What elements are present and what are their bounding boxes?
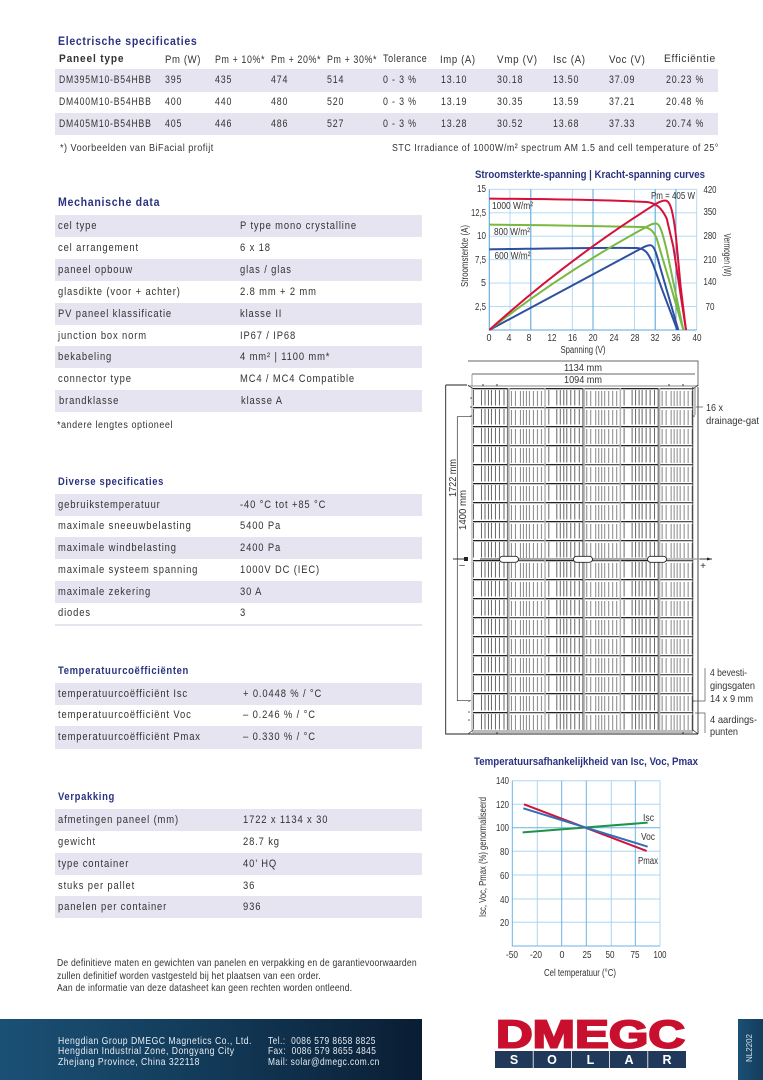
heading: diverse specifications: Diverse specificaties <box>58 476 164 488</box>
table: diverse specifications <box>55 494 422 626</box>
table row: DM405M10-B54HBB: 13.28 <box>441 118 467 130</box>
table row: DM400M10-B54HBB: 13.19 <box>441 96 467 108</box>
irradiance labels: 800 W/m² <box>494 227 531 238</box>
irradiance labels: 1000 W/m² <box>492 201 534 212</box>
table row: DM395M10-B54HBB: 37.09 <box>609 74 635 86</box>
table row: DM395M10-B54HBB: 474 <box>271 74 288 86</box>
drainage callout: 16 x <box>706 403 724 414</box>
table: diverse specifications: diodes <box>58 607 91 619</box>
table: mechanical data: connector type <box>58 373 132 385</box>
phone fax mail: Fax: 0086 579 8655 4845 <box>268 1046 376 1057</box>
phone fax mail <box>268 1036 380 1068</box>
table row: DM395M10-B54HBB: 435 <box>215 74 232 86</box>
table row: DM405M10-B54HBB: 37.33 <box>609 118 635 130</box>
table header: electrical specifications: Vmp (V) <box>497 54 538 66</box>
table row: DM395M10-B54HBB: 13.50 <box>553 74 579 86</box>
table: temperature coefficients: – 0.330 % / °C <box>243 731 316 743</box>
table header: electrical specifications: Paneel type <box>59 53 124 65</box>
table: mechanical data: 6 x 18 <box>240 242 271 254</box>
heading: mechanical data: Mechanische data <box>58 197 160 209</box>
mounting holes callout: 14 x 9 mm <box>710 694 753 705</box>
table: temperature coefficients: – 0.246 % / °C <box>243 709 316 721</box>
table row: DM400M10-B54HBB: 20.48 % <box>666 96 704 108</box>
y axis labels: 60 <box>500 871 509 882</box>
dimension labels: 1722 mm <box>448 459 459 497</box>
table row: DM400M10-B54HBB <box>59 96 704 108</box>
table: diverse specifications: 3 <box>240 607 246 619</box>
table row: DM395M10-B54HBB: DM395M10-B54HBB <box>59 74 152 86</box>
company address <box>58 1036 252 1068</box>
table row: DM405M10-B54HBB: 486 <box>271 118 288 130</box>
table row: DM405M10-B54HBB: 13.68 <box>553 118 579 130</box>
right axis labels: 210 <box>704 255 717 266</box>
table header: electrical specifications: Pm (W) <box>165 54 201 66</box>
table: mechanical data: bekabeling <box>58 351 112 363</box>
table: mechanical data: 2.8 mm + 2 mm <box>240 286 317 298</box>
x axis labels: 75 <box>630 950 640 961</box>
table header: electrical specifications: Tolerance <box>383 53 427 65</box>
table: packaging: afmetingen paneel (mm) <box>58 814 179 826</box>
table: mechanical data: glas / glas <box>240 264 292 276</box>
bottom axis labels: 40 <box>692 333 702 344</box>
dimension labels: 1134 mm <box>564 363 602 374</box>
grounding callout: punten <box>710 727 738 738</box>
table: mechanical data: klasse A <box>241 395 283 407</box>
table row: DM400M10-B54HBB: 30.35 <box>497 96 523 108</box>
cables and junction boxes: + <box>700 561 706 572</box>
table: packaging: stuks per pallet <box>58 880 135 892</box>
disclaimer text <box>57 958 417 994</box>
table: mechanical data: PV paneel klassificatie <box>58 308 172 320</box>
table: temperature coefficients: temperatuurcoëfficiënt Isc <box>58 688 188 700</box>
right axis labels: 140 <box>704 277 717 288</box>
document code: NL2202 <box>745 1034 754 1062</box>
right axis labels <box>704 185 717 313</box>
table row: DM400M10-B54HBB: DM400M10-B54HBB <box>59 96 152 108</box>
table: diverse specifications: maximale zekering <box>58 586 151 598</box>
table row: DM405M10-B54HBB: 30.52 <box>497 118 523 130</box>
grounding callout: 4 aardings- <box>710 715 757 726</box>
bottom axis labels: 0 <box>486 333 492 344</box>
table: temperature coefficients <box>55 683 422 749</box>
table row: DM400M10-B54HBB: 37.21 <box>609 96 635 108</box>
line labels: Pmax <box>638 856 658 867</box>
table: mechanical data: glasdikte (voor + achter) <box>58 286 181 298</box>
dimension labels <box>448 363 602 530</box>
bottom axis labels: 28 <box>630 333 640 344</box>
x axis labels: -50 <box>506 950 518 961</box>
left axis labels: 12,5 <box>471 208 486 219</box>
table row: DM405M10-B54HBB: 20.74 % <box>666 118 704 130</box>
dimension labels: 1094 mm <box>564 375 602 386</box>
bottom axis labels <box>486 333 702 344</box>
heading: packaging: Verpakking <box>58 791 115 803</box>
right axis labels: 70 <box>706 302 715 313</box>
table: mechanical data: P type mono crystalline <box>240 220 357 232</box>
bottom axis labels: 20 <box>588 333 598 344</box>
table row: DM400M10-B54HBB: 0 - 3 % <box>383 96 417 108</box>
disclaimer text: De definitieve maten en gewichten van panelen en verpakking en de garantievoorwaarden <box>57 958 417 969</box>
y axis labels <box>496 776 509 929</box>
table: diverse specifications: maximale sneeuwbelasting <box>58 520 192 532</box>
bottom axis labels: 36 <box>672 333 681 344</box>
table header: electrical specifications: Efficiëntie <box>664 53 716 65</box>
right axis labels: 420 <box>704 185 717 196</box>
bottom axis labels: 4 <box>506 333 512 344</box>
table: mechanical data: MC4 / MC4 Compatible <box>240 373 355 385</box>
table header: electrical specifications: Imp (A) <box>440 54 476 66</box>
logo solar bar: R <box>662 1053 672 1067</box>
y axis labels: 80 <box>500 847 509 858</box>
table: diverse specifications: maximale systeem spanning <box>58 564 198 576</box>
heading: temperature dependence chart: Temperatuursafhankelijkheid van Isc, Voc, Pmax <box>474 756 699 768</box>
left axis labels: 7,5 <box>475 255 486 266</box>
table: packaging: 936 <box>243 901 261 913</box>
diagram: panel dimensions <box>446 361 759 738</box>
grid <box>512 781 660 946</box>
disclaimer text: Aan de informatie van deze datasheet kan geen rechten worden ontleend. <box>57 983 352 994</box>
x axis labels: 100 <box>654 950 667 961</box>
right column diagrams <box>445 170 759 978</box>
table: packaging: 1722 x 1134 x 30 <box>243 814 328 826</box>
chart: current voltage and power curves: Stroomsterkte (A) <box>460 225 471 287</box>
axis titles: Cel temperatuur (°C) <box>544 968 616 979</box>
table: mechanical data: brandklasse <box>59 395 119 407</box>
bottom axis labels: 16 <box>568 333 577 344</box>
table row: DM395M10-B54HBB: 13.10 <box>441 74 467 86</box>
table: packaging: 40’ HQ <box>243 858 277 870</box>
table row: DM395M10-B54HBB: 0 - 3 % <box>383 74 417 86</box>
table: packaging: 28.7 kg <box>243 836 280 848</box>
table: diverse specifications: 5400 Pa <box>240 520 281 532</box>
right axis labels: 350 <box>704 207 717 218</box>
drainage callout: drainage-gat <box>706 416 759 427</box>
table: mechanical data: junction box norm <box>58 330 147 342</box>
table: diverse specifications: 1000V DC (IEC) <box>240 564 320 576</box>
table: diverse specifications: maximale windbelasting <box>58 542 177 554</box>
y axis labels: 100 <box>496 823 509 834</box>
left axis labels <box>471 184 486 313</box>
x axis labels: -20 <box>530 950 542 961</box>
chart: current voltage and power curves <box>460 184 732 356</box>
table row: DM395M10-B54HBB: 395 <box>165 74 182 86</box>
cables and junction boxes: – <box>459 560 465 571</box>
company address: Hengdian Group DMEGC Magnetics Co., Ltd. <box>58 1036 252 1047</box>
axes <box>489 189 697 330</box>
company address: Zhejiang Province, China 322118 <box>58 1057 200 1068</box>
table row: DM400M10-B54HBB: 480 <box>271 96 288 108</box>
y axis labels: 120 <box>496 800 509 811</box>
left axis labels: 10 <box>477 231 486 242</box>
logo solar bar: S <box>510 1053 518 1067</box>
table row: DM405M10-B54HBB: DM405M10-B54HBB <box>59 118 152 130</box>
mounting holes callout: 4 bevesti- <box>710 668 747 679</box>
table: temperature coefficients: temperatuurcoëfficiënt Pmax <box>58 731 201 743</box>
left axis labels: 2,5 <box>475 302 486 313</box>
table row: DM395M10-B54HBB: 514 <box>327 74 344 86</box>
phone fax mail: Mail: solar@dmegc.com.cn <box>268 1057 380 1068</box>
y axis labels: 20 <box>500 918 509 929</box>
table: mechanical data: cel arrangement <box>58 242 139 254</box>
curves <box>489 199 686 330</box>
table: mechanical data: cel type <box>58 220 97 232</box>
y axis labels: 40 <box>500 895 509 906</box>
bottom axis labels: 24 <box>610 333 619 344</box>
axis titles: Spanning (V) <box>560 345 606 356</box>
table: packaging <box>55 809 422 918</box>
table row: DM395M10-B54HBB <box>55 69 718 92</box>
table: diverse specifications: -40 °C tot +85 °C <box>240 499 326 511</box>
dimension labels: 1400 mm <box>458 490 469 530</box>
bottom axis labels: 32 <box>650 333 660 344</box>
x axis labels: 0 <box>560 950 565 961</box>
table row: DM400M10-B54HBB: 400 <box>165 96 182 108</box>
table row: DM400M10-B54HBB: 440 <box>215 96 232 108</box>
footnote: bifacial: *) Voorbeelden van BiFacial profijt <box>60 143 214 154</box>
mounting holes callout: gingsgaten <box>710 681 755 692</box>
x axis labels: 50 <box>606 950 615 961</box>
table: temperature coefficients: + 0.0448 % / °C <box>243 688 322 700</box>
table row: DM400M10-B54HBB: 13.59 <box>553 96 579 108</box>
chart: temperature dependence <box>478 776 667 979</box>
table row: DM405M10-B54HBB: 0 - 3 % <box>383 118 417 130</box>
bottom axis labels: 12 <box>548 333 557 344</box>
irradiance labels: Pm = 405 W <box>651 191 695 202</box>
x axis labels <box>506 950 667 961</box>
mounting holes <box>468 384 695 734</box>
footer strip: document code <box>738 1019 763 1080</box>
table: mechanical data <box>55 215 422 412</box>
table row: DM405M10-B54HBB <box>55 113 718 135</box>
logo: DMEGC Solar <box>495 1019 686 1068</box>
table row: DM400M10-B54HBB: 520 <box>327 96 344 108</box>
footnote: STC conditions: STC Irradiance of 1000W/m² spectrum AM 1.5 and cell temperature of 25° <box>392 143 719 154</box>
lines <box>523 804 648 851</box>
disclaimer text: zullen definitief worden vastgesteld bij het plaatsen van een order. <box>57 970 321 982</box>
logo solar bar: L <box>587 1053 595 1067</box>
heading: temperature coefficients: Temperatuurcoëfficiënten <box>58 665 189 677</box>
chart: current voltage and power curves: Vermogen (W) <box>721 234 732 276</box>
grid <box>489 189 697 330</box>
phone fax mail: Tel.: 0086 579 8658 8825 <box>268 1036 376 1047</box>
grounding callout <box>710 715 757 738</box>
table: packaging: panelen per container <box>58 901 167 913</box>
left axis labels: 15 <box>477 184 486 195</box>
cables and junction boxes <box>453 556 712 572</box>
footer bar: contact details <box>0 1019 422 1080</box>
table: mechanical data: klasse II <box>240 308 282 320</box>
logo solar bar: O <box>547 1053 557 1067</box>
table: packaging: gewicht <box>58 836 96 848</box>
solar cells upper half <box>473 388 693 559</box>
table header: electrical specifications: Isc (A) <box>553 54 586 66</box>
heading: electrical specifications: Electrische specificaties <box>58 36 197 48</box>
right axis labels: 280 <box>704 231 717 242</box>
table header: electrical specifications: Pm + 20%* <box>271 54 321 66</box>
table: mechanical data: paneel opbouw <box>58 264 133 276</box>
table header: electrical specifications: Pm + 30%* <box>327 54 377 66</box>
table: diverse specifications: gebruikstemperatuur <box>58 499 161 511</box>
table: mechanical data: 4 mm² | 1100 mm* <box>240 351 330 363</box>
table row: DM395M10-B54HBB: 20.23 % <box>666 74 704 86</box>
bottom axis labels: 8 <box>526 333 532 344</box>
irradiance labels: 600 W/m² <box>494 251 531 262</box>
table: packaging: type container <box>58 858 129 870</box>
heading: current voltage chart: Stroomsterkte-spanning | Kracht-spanning curves <box>475 169 705 181</box>
table header: electrical specifications: Pm + 10%* <box>215 54 265 66</box>
line labels: Voc <box>641 832 655 843</box>
table: diverse specifications: 30 A <box>240 586 262 598</box>
footnote: cable lengths: *andere lengtes optioneel <box>57 420 173 431</box>
table: packaging: 36 <box>243 880 255 892</box>
company address: Hengdian Industrial Zone, Dongyang City <box>58 1046 235 1057</box>
y axis labels: 140 <box>496 776 509 787</box>
x axis labels: 25 <box>582 950 592 961</box>
logo solar bar: A <box>624 1053 634 1067</box>
left axis labels: 5 <box>481 278 486 289</box>
table row: DM405M10-B54HBB: 446 <box>215 118 232 130</box>
table header: electrical specifications: Voc (V) <box>609 54 645 66</box>
table row: DM395M10-B54HBB: 30.18 <box>497 74 523 86</box>
table: mechanical data: IP67 / IP68 <box>240 330 296 342</box>
table: temperature coefficients: temperatuurcoëfficiënt Voc <box>58 709 192 721</box>
irradiance labels <box>492 191 695 262</box>
chart: temperature dependence: Isc, Voc, Pmax (%) genormaliseerd <box>478 797 489 917</box>
table row: DM405M10-B54HBB: 527 <box>327 118 344 130</box>
mounting holes callout <box>710 668 755 705</box>
table: diverse specifications: 2400 Pa <box>240 542 281 554</box>
drainage callout <box>706 403 759 427</box>
line labels: Isc <box>643 813 654 824</box>
solar cells lower half <box>473 560 693 731</box>
line labels <box>638 813 658 867</box>
panel frame <box>446 361 705 734</box>
logo solar bar <box>495 1051 686 1068</box>
table row: DM405M10-B54HBB: 405 <box>165 118 182 130</box>
table header: electrical specifications <box>59 53 716 66</box>
